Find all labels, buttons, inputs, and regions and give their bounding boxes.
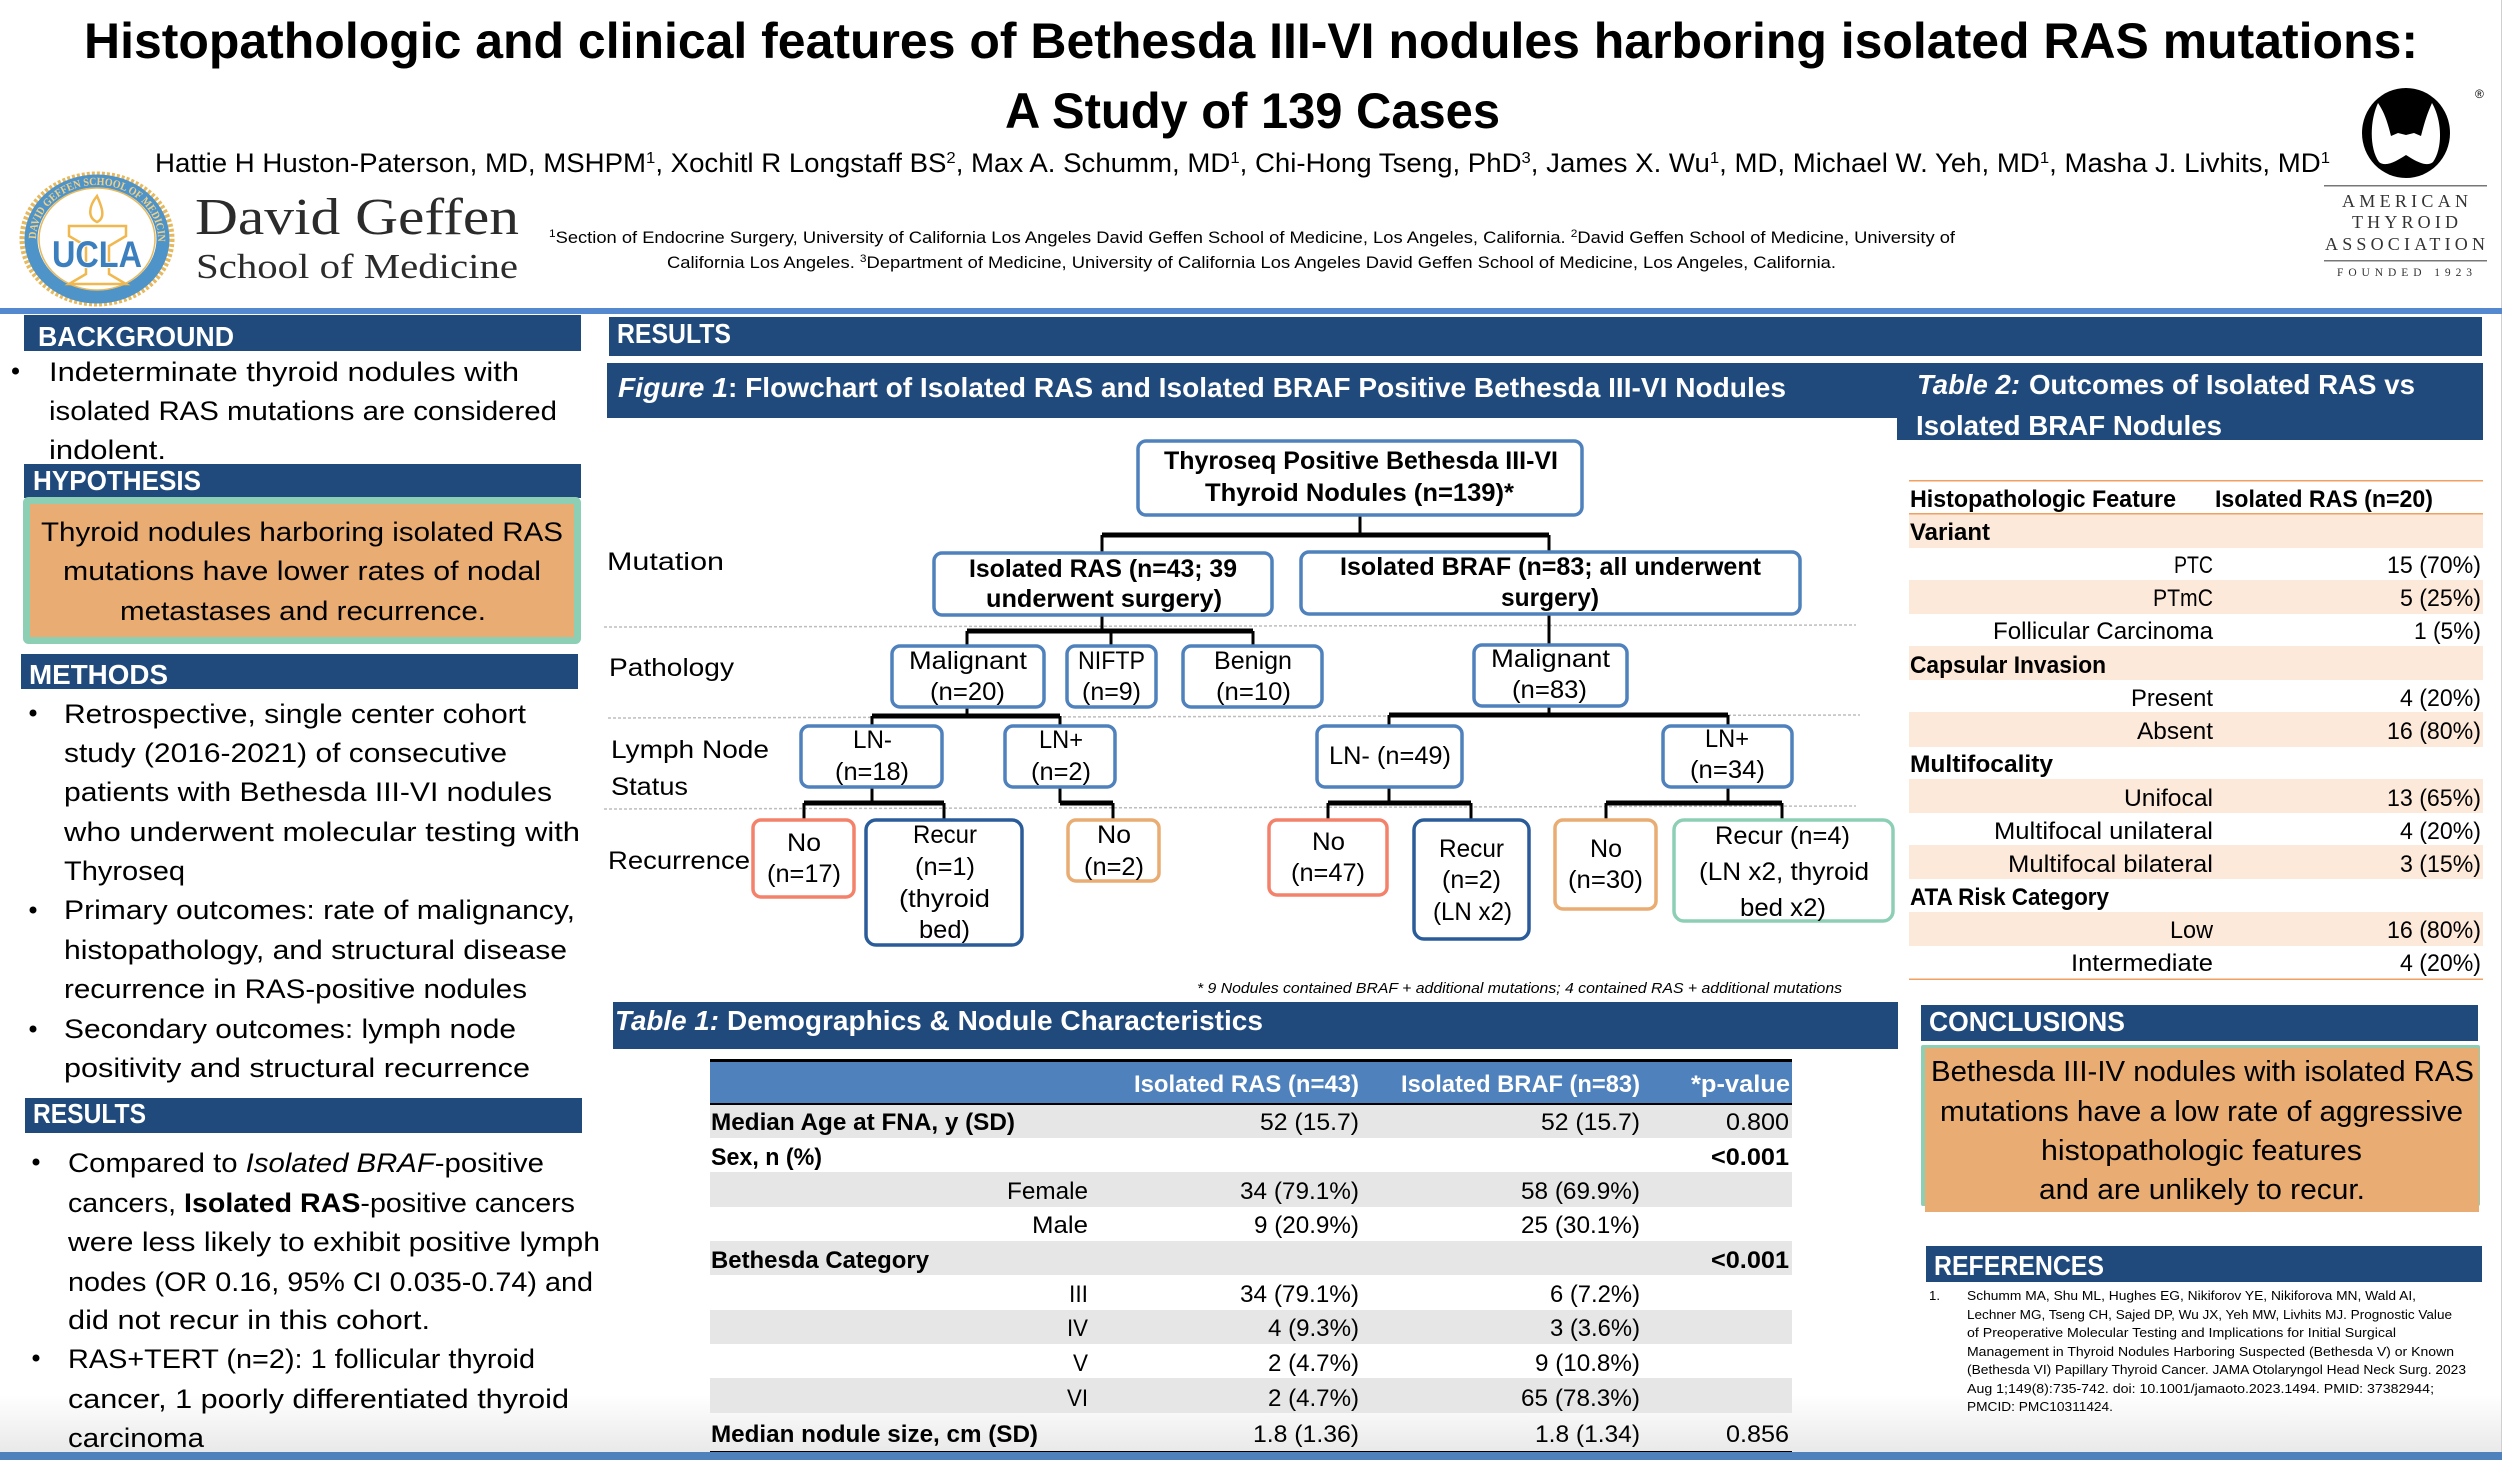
box: no recurrence 17: (n=17) xyxy=(767,860,841,888)
box: recurrence 4: bed x2) xyxy=(1740,894,1826,922)
box: no recurrence 30 xyxy=(1555,820,1656,909)
icon: UCLA seal xyxy=(20,172,174,306)
table 2 feature labels: ATA Risk Category xyxy=(1910,884,2110,911)
affiliations: California Los Angeles. xyxy=(667,253,841,272)
table 2 feature labels: Unifocal xyxy=(2124,785,2213,812)
heading: background: BACKGROUND xyxy=(38,321,234,352)
panel: background xyxy=(12,315,581,465)
table 1 header row: Isolated RAS (n=43) xyxy=(1134,1071,1359,1098)
table 2 feature labels: Absent xyxy=(2137,718,2213,745)
box: NIFTP xyxy=(1067,646,1156,707)
box: malignant BRAF xyxy=(1474,645,1627,706)
connectors xyxy=(804,515,1782,819)
text: results bullets xyxy=(67,1148,600,1453)
panel: hypothesis xyxy=(24,464,581,640)
table 2 values: 4 (20%) xyxy=(2400,950,2481,977)
table 2 feature labels: PTmC xyxy=(2153,585,2213,612)
heading: conclusions: CONCLUSIONS xyxy=(1929,1006,2125,1037)
row labels xyxy=(607,548,769,875)
table 1 BRAF values: 9 (10.8%) xyxy=(1535,1350,1640,1377)
box: malignant RAS: (n=20) xyxy=(930,678,1005,706)
text: conclusion statement: mutations have a low rate of aggressive xyxy=(1940,1096,2463,1128)
box: no recurrence 2: (n=2) xyxy=(1084,853,1144,881)
table 1 RAS values: 9 (20.9%) xyxy=(1254,1212,1359,1239)
heading: results banner: RESULTS xyxy=(617,318,731,349)
table 2 values: 16 (80%) xyxy=(2387,718,2481,745)
table 1 p-values: 0.800 xyxy=(1726,1109,1789,1136)
text: results bullets: cancers, Isolated RAS -positive cancers xyxy=(68,1188,575,1218)
text: results bullets: nodes (OR 0.16, 95% CI 0.035-0.74) and xyxy=(68,1267,593,1297)
table 1 BRAF values: 65 (78.3%) xyxy=(1521,1385,1640,1412)
row labels: Recurrence xyxy=(608,847,750,875)
box: recurrence 4: Recur (n=4) xyxy=(1715,822,1850,850)
table 1 row labels: Male xyxy=(1032,1212,1088,1239)
table 1 row labels: Bethesda Category xyxy=(711,1247,930,1274)
table 1 p-values: <0.001 xyxy=(1711,1144,1789,1171)
row labels: Lymph Node xyxy=(611,736,769,764)
table 1 row labels: V xyxy=(1073,1350,1088,1377)
table 1 p-values xyxy=(1711,1109,1789,1448)
box: LN+ BRAF: (n=34) xyxy=(1690,756,1765,784)
table 1 BRAF values: 25 (30.1%) xyxy=(1521,1212,1640,1239)
heading: table 2: Table 2: xyxy=(1917,369,2020,400)
table 1 RAS values: 1.8 (1.36) xyxy=(1253,1421,1359,1448)
panel: methods xyxy=(21,654,580,1083)
text: results bullets: carcinoma xyxy=(68,1423,205,1453)
box: no recurrence 47 xyxy=(1269,820,1387,895)
table 1 RAS values: 34 (79.1%) xyxy=(1240,1281,1359,1308)
box: all nodules: Thyroseq Positive Bethesda III-VI xyxy=(1164,447,1558,475)
authors: 3 xyxy=(1522,150,1531,167)
text: methods bullets: study (2016-2021) of consecutive xyxy=(64,738,507,768)
icon: American Thyroid Association logo: ® xyxy=(2475,87,2484,101)
box: recurrence 1: bed) xyxy=(919,916,970,944)
box: no recurrence 47: (n=47) xyxy=(1291,859,1365,887)
affiliations: 3 xyxy=(860,253,867,265)
row labels: Mutation xyxy=(607,548,724,576)
icon: American Thyroid Association logo xyxy=(2324,87,2487,279)
flowchart xyxy=(604,441,1893,945)
table 1 row labels: Median Age at FNA, y (SD) xyxy=(711,1109,1015,1136)
table 2 values: 1 (5%) xyxy=(2414,618,2481,645)
heading: results banner xyxy=(609,317,2482,356)
box: LN- BRAF xyxy=(1317,726,1462,787)
authors: , MD, Michael W. Yeh, MD xyxy=(1719,148,2040,178)
table 2 values: 3 (15%) xyxy=(2400,851,2481,878)
heading: hypothesis: HYPOTHESIS xyxy=(33,465,201,496)
authors: 1 xyxy=(2321,150,2330,167)
heading: figure 1: Figure 1 xyxy=(618,372,728,403)
heading: table 2: Isolated BRAF Nodules xyxy=(1916,410,2222,441)
table 1 row labels: Median nodule size, cm (SD) xyxy=(711,1421,1038,1448)
table 1 RAS values: 34 (79.1%) xyxy=(1240,1178,1359,1205)
text: results bullets: RAS+TERT (n=2): 1 follicular thyroid xyxy=(68,1344,535,1374)
box: no recurrence 2: No xyxy=(1097,821,1131,849)
heading: figure 1 xyxy=(607,363,1897,418)
table 2 feature labels: Variant xyxy=(1910,519,1990,546)
table 1 header row xyxy=(1134,1071,1790,1098)
table 1 row labels xyxy=(711,1109,1088,1448)
table 2 header row: Histopathologic Feature xyxy=(1910,486,2176,513)
table 2 feature labels: Multifocal unilateral xyxy=(1994,818,2213,845)
icon: American Thyroid Association logo: AMERICAN xyxy=(2342,191,2468,211)
table 2 values: 4 (20%) xyxy=(2400,818,2481,845)
heading: references: REFERENCES xyxy=(1934,1250,2104,1281)
table 1 BRAF values: 1.8 (1.34) xyxy=(1535,1421,1640,1448)
authors: Hattie H Huston-Paterson, MD, MSHPM xyxy=(155,148,626,178)
heading: figure 1: : Flowchart of Isolated RAS and Isolated BRAF Positive Bethesda III-VI Nodules xyxy=(728,372,1786,403)
table 1 BRAF values: 3 (3.6%) xyxy=(1550,1315,1640,1342)
authors: 1 xyxy=(1230,150,1240,167)
text: methods bullets: Secondary outcomes: lymph node xyxy=(64,1014,516,1044)
heading: table 2 xyxy=(1897,363,2483,441)
table 2 values: 16 (80%) xyxy=(2387,917,2481,944)
text: conclusion statement xyxy=(1931,1056,2474,1206)
affiliations xyxy=(549,228,1955,272)
authors: , Max A. Schumm, MD xyxy=(956,148,1230,178)
table 1 row labels: Sex, n (%) xyxy=(711,1144,822,1171)
table 1 row labels: IV xyxy=(1067,1315,1088,1342)
box: LN+ RAS xyxy=(1005,726,1115,787)
affiliations: Section of Endocrine Surgery, University of California Los Angeles David Geffen School of Medicine, Los Angeles, California. xyxy=(556,228,1571,247)
box: LN- RAS: (n=18) xyxy=(835,758,909,786)
authors: , Xochitl R Longstaff BS xyxy=(655,148,946,178)
box: no recurrence 47: No xyxy=(1312,828,1345,856)
box: malignant RAS: Malignant xyxy=(909,647,1027,675)
text: methods bullets: positivity and structural recurrence xyxy=(64,1053,530,1083)
icon: American Thyroid Association logo: THYROID xyxy=(2352,212,2458,232)
table 2 values: 4 (20%) xyxy=(2400,685,2481,712)
logo text: David Geffen School of Medicine: David Geffen xyxy=(195,189,519,246)
footnote: * 9 Nodules contained BRAF + additional mutations; 4 contained RAS + additional mutations xyxy=(1197,981,1842,997)
table 2 feature labels: Intermediate xyxy=(2071,950,2213,977)
box: no recurrence 17: No xyxy=(787,829,821,857)
table 2 values: 5 (25%) xyxy=(2400,585,2481,612)
text: hypothesis statement: metastases and recurrence. xyxy=(120,596,486,626)
heading: table 1: Demographics & Nodule Characteristics xyxy=(727,1005,1263,1036)
box: LN+ BRAF: LN+ xyxy=(1705,725,1749,753)
authors: , Chi-Hong Tseng, PhD xyxy=(1240,148,1522,178)
text: results bullets: did not recur in this cohort. xyxy=(68,1305,430,1335)
affiliations: 2 xyxy=(1571,228,1577,240)
box: recurrence 2: (n=2) xyxy=(1442,866,1501,894)
text: background bullet: indolent. xyxy=(49,435,166,465)
table 1 RAS values: 52 (15.7) xyxy=(1260,1109,1359,1136)
text: reference list: of Preoperative Molecular Testing and Implications for Initial Surgical xyxy=(1967,1325,2396,1340)
authors: 1 xyxy=(2040,150,2049,167)
heading: table 2: Outcomes of Isolated RAS vs xyxy=(2029,369,2415,400)
box: isolated BRAF xyxy=(1301,552,1800,614)
table 1 RAS values: 2 (4.7%) xyxy=(1268,1385,1359,1412)
affiliations: David Geffen School of Medicine, University of xyxy=(1577,228,1955,247)
table 2 feature labels: Multifocal bilateral xyxy=(2008,851,2213,878)
table 1 BRAF values: 6 (7.2%) xyxy=(1550,1281,1640,1308)
text: methods bullets: recurrence in RAS-positive nodules xyxy=(64,974,527,1004)
table 1 BRAF values: 52 (15.7) xyxy=(1541,1109,1640,1136)
text: conclusion statement: histopathologic features xyxy=(2041,1135,2362,1167)
icon: American Thyroid Association logo: FOUNDED 1923 xyxy=(2337,267,2472,279)
table 1 header row: Isolated BRAF (n=83) xyxy=(1401,1071,1640,1098)
text: results bullets: Compared to Isolated BRAF -positive xyxy=(68,1148,544,1178)
box: LN- BRAF: LN- (n=49) xyxy=(1329,742,1451,770)
logo text: David Geffen School of Medicine xyxy=(195,189,519,286)
table 1 row labels: Female xyxy=(1007,1178,1088,1205)
authors: , Masha J. Livhits, MD xyxy=(2049,148,2321,178)
authors: , James X. Wu xyxy=(1531,148,1710,178)
text: conclusion statement: and are unlikely to recur. xyxy=(2039,1174,2365,1206)
text: reference list: Lechner MG, Tseng CH, Sajed DP, Wu JX, Yeh MW, Livhits MJ. Prognostic Value xyxy=(1967,1307,2452,1322)
box: NIFTP: (n=9) xyxy=(1082,678,1141,706)
box: recurrence 1 xyxy=(866,820,1022,945)
text: methods bullets: who underwent molecular testing with xyxy=(63,817,580,847)
box: recurrence 2: (LN x2) xyxy=(1433,898,1512,926)
title xyxy=(84,13,2418,139)
box: all nodules: Thyroid Nodules (n=139)* xyxy=(1205,479,1514,507)
table 1 RAS values: 2 (4.7%) xyxy=(1268,1350,1359,1377)
affiliations: 1 xyxy=(549,228,556,240)
text: reference list: (Bethesda VI) Papillary Thyroid Cancer. JAMA Otolaryngol Head Neck Surg. 2023 xyxy=(1967,1362,2466,1377)
text: background bullet: Indeterminate thyroid nodules with xyxy=(49,357,519,387)
box: LN+ RAS: (n=2) xyxy=(1031,758,1091,786)
box: all nodules xyxy=(1138,441,1582,515)
box: recurrence 2 xyxy=(1414,820,1529,939)
table 2 feature labels: PTC xyxy=(2174,552,2213,579)
logo text: David Geffen School of Medicine: School of Medicine xyxy=(196,247,518,286)
box: no recurrence 30: No xyxy=(1590,835,1622,863)
table 2 feature labels: Capsular Invasion xyxy=(1910,652,2106,679)
box: no recurrence 30: (n=30) xyxy=(1568,866,1643,894)
text: hypothesis statement: Thyroid nodules harboring isolated RAS xyxy=(41,517,563,547)
table 1 row labels: III xyxy=(1069,1281,1088,1308)
text: methods bullets: Thyroseq xyxy=(64,856,185,886)
heading: table 1 xyxy=(613,1002,1898,1049)
box: isolated RAS: Isolated RAS (n=43; 39 xyxy=(969,555,1237,583)
heading: results: RESULTS xyxy=(33,1098,146,1129)
box: recurrence 4 xyxy=(1674,820,1893,922)
table 1 BRAF values: 58 (69.9%) xyxy=(1521,1178,1640,1205)
affiliations: Department of Medicine, University of California Los Angeles David Geffen School of Medicine, Los Angeles, California. xyxy=(867,253,1836,272)
box: recurrence 1: Recur xyxy=(913,821,977,849)
box: NIFTP: NIFTP xyxy=(1078,647,1145,675)
table 2 values: 13 (65%) xyxy=(2387,785,2481,812)
box: benign: (n=10) xyxy=(1216,678,1291,706)
table 2 values: 15 (70%) xyxy=(2387,552,2481,579)
icon: American Thyroid Association logo: ASSOCIATION xyxy=(2325,234,2485,254)
table 1 row labels: VI xyxy=(1067,1385,1088,1412)
table 2 header row: Isolated RAS (n=20) xyxy=(2215,486,2433,513)
table 1 RAS values: 4 (9.3%) xyxy=(1268,1315,1359,1342)
text: results bullets: were less likely to exhibit positive lymph xyxy=(67,1227,600,1257)
box: LN- RAS: LN- xyxy=(853,726,892,754)
row labels: Status xyxy=(611,773,688,801)
box: LN- RAS xyxy=(801,726,942,787)
table 1 p-values: 0.856 xyxy=(1726,1421,1789,1448)
box: malignant BRAF: Malignant xyxy=(1491,645,1610,673)
text: methods bullets: Primary outcomes: rate of malignancy, xyxy=(64,895,575,925)
table 2 feature labels: Follicular Carcinoma xyxy=(1993,618,2214,645)
icon: UCLA seal: UCLA xyxy=(52,234,142,275)
box: benign xyxy=(1183,646,1322,707)
heading: table 1: Table 1: xyxy=(615,1005,719,1036)
table 1 BRAF values xyxy=(1521,1109,1640,1448)
authors: 2 xyxy=(946,150,956,167)
box: recurrence 1: (thyroid xyxy=(899,885,990,913)
table 2 feature labels: Low xyxy=(2170,917,2214,944)
box: LN+ BRAF xyxy=(1663,725,1792,787)
text: methods bullets: patients with Bethesda III-VI nodules xyxy=(64,777,552,807)
heading: methods: METHODS xyxy=(29,659,168,690)
panel: references xyxy=(1926,1246,2482,1414)
text: results bullets: cancer, 1 poorly differentiated thyroid xyxy=(68,1384,569,1414)
text: background bullet: isolated RAS mutations are considered xyxy=(49,396,557,426)
box: malignant RAS xyxy=(892,646,1044,707)
authors: 1 xyxy=(1710,150,1719,167)
text: methods bullets xyxy=(63,699,580,1083)
table 1 RAS values xyxy=(1240,1109,1359,1448)
box: isolated RAS: underwent surgery) xyxy=(986,585,1222,613)
row labels: Pathology xyxy=(609,654,735,682)
text: reference list xyxy=(1929,1288,2466,1414)
text: reference list: 1. xyxy=(1929,1288,1940,1303)
text: reference list: Management in Thyroid Nodules Harboring Suspected (Bethesda V) or Known xyxy=(1967,1344,2454,1359)
table 2 xyxy=(1909,480,2483,980)
text: hypothesis statement: mutations have lower rates of nodal xyxy=(63,556,541,586)
text: reference list: Schumm MA, Shu ML, Hughes EG, Nikiforov YE, Nikiforova MN, Wald AI, xyxy=(1967,1288,2416,1303)
box: isolated BRAF: surgery) xyxy=(1501,584,1599,612)
text: reference list: Aug 1;149(8):735-742. doi: 10.1001/jamaoto.2023.1494. PMID: 37382944; xyxy=(1967,1381,2434,1396)
authors: 1 xyxy=(646,150,655,167)
box: recurrence 2: Recur xyxy=(1439,835,1504,863)
table 2 values xyxy=(2387,552,2481,977)
text: reference list: PMCID: PMC10311424. xyxy=(1967,1399,2113,1414)
panel: conclusions xyxy=(1921,1005,2480,1212)
box: benign: Benign xyxy=(1214,647,1292,675)
box: isolated BRAF: Isolated BRAF (n=83; all underwent xyxy=(1340,553,1762,581)
table 2 feature labels xyxy=(1910,519,2214,977)
table 2 feature labels: Multifocality xyxy=(1910,751,2054,778)
box: no recurrence 2 xyxy=(1068,820,1159,881)
table 2 header row xyxy=(1910,486,2433,513)
table 1 xyxy=(710,1059,1792,1454)
box: malignant BRAF: (n=83) xyxy=(1512,676,1587,704)
text: background bullet xyxy=(49,357,557,465)
text: hypothesis statement xyxy=(41,517,563,626)
text: methods bullets: Retrospective, single center cohort xyxy=(64,699,527,729)
text: conclusion statement: Bethesda III-IV nodules with isolated RAS xyxy=(1931,1056,2474,1088)
box: LN+ RAS: LN+ xyxy=(1039,726,1083,754)
box: no recurrence 17 xyxy=(753,820,854,897)
table 1 header row: *p-value xyxy=(1691,1071,1790,1098)
table 1 p-values: <0.001 xyxy=(1711,1247,1789,1274)
panel: results left xyxy=(25,1098,600,1453)
box: recurrence 4: (LN x2, thyroid xyxy=(1699,858,1869,886)
table 2 feature labels: Present xyxy=(2131,685,2213,712)
text: methods bullets: histopathology, and structural disease xyxy=(64,935,567,965)
box: recurrence 1: (n=1) xyxy=(915,853,975,881)
box: isolated RAS xyxy=(934,553,1272,615)
title: A Study of 139 Cases xyxy=(1005,83,1500,139)
title: Histopathologic and clinical features of Bethesda III-VI nodules harboring isolated RAS mutations: xyxy=(84,13,2418,69)
